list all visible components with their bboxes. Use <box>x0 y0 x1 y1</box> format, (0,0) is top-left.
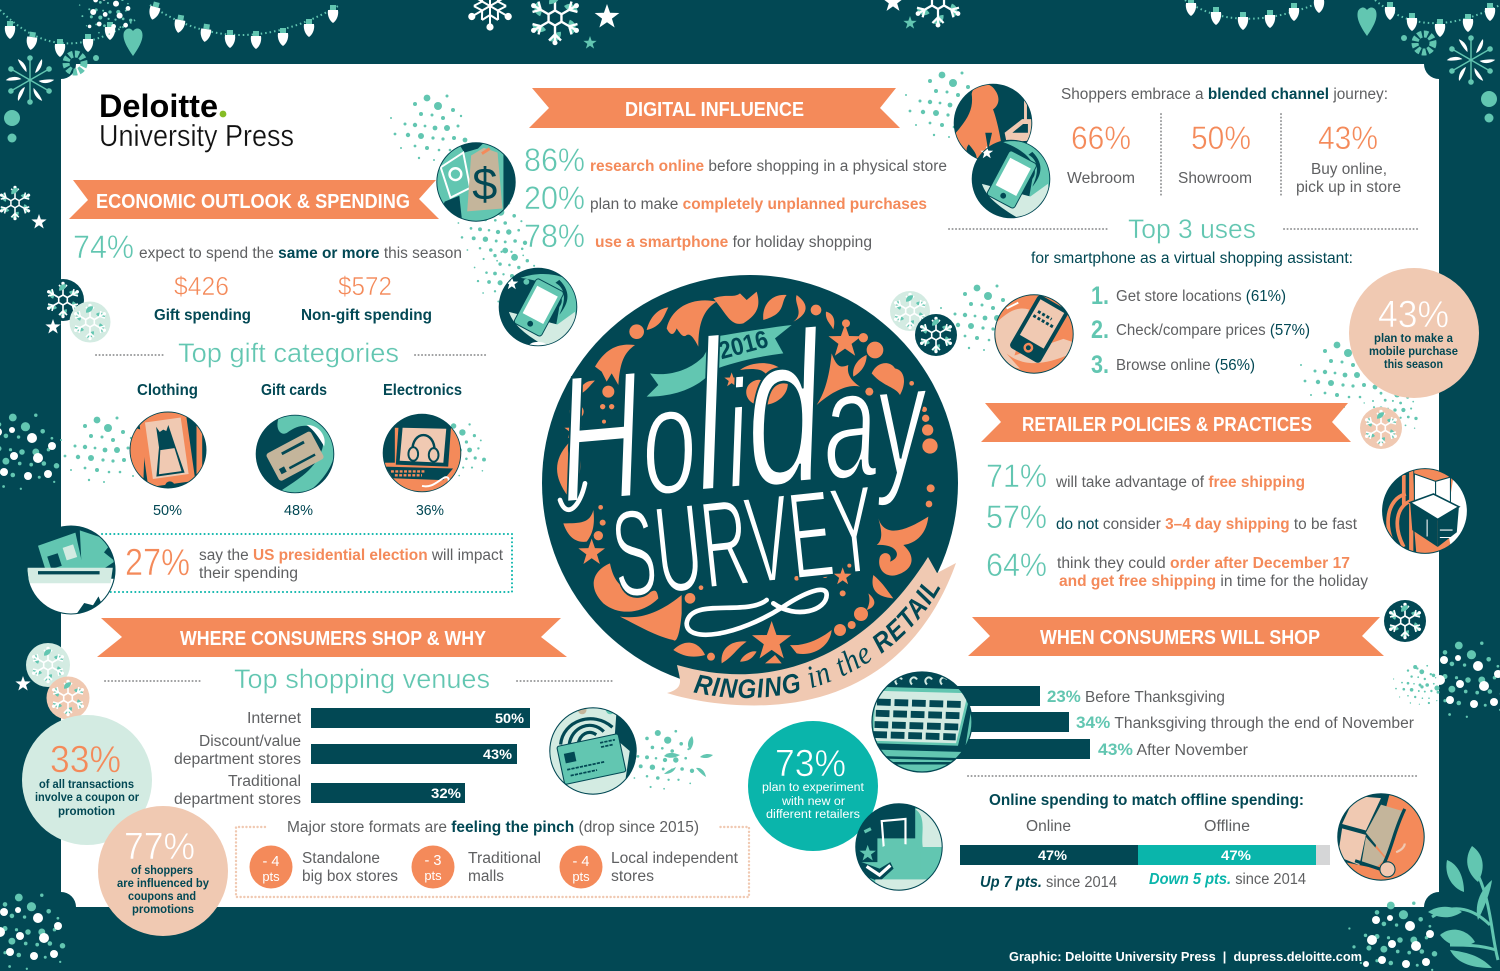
stat: local independent stores <box>560 846 739 888</box>
bar chart: timing: 23% Before Thanksgiving <box>1047 687 1225 706</box>
logo: Deloitte University Press: Deloitte <box>99 88 218 124</box>
list: top three uses: 3. <box>1091 351 1109 379</box>
stat: webroom: 66% <box>1071 120 1131 156</box>
banner: retailer policies <box>981 403 1351 442</box>
border decoration: top left lights <box>0 0 340 143</box>
stat: traditional malls: pts <box>424 868 442 883</box>
stacked bar: online vs offline: Up 7 pts. since 2014 <box>980 874 1117 891</box>
ribbon: ringing in the retail: RINGING in the RETAIL <box>694 584 940 698</box>
list: top three uses: Get store locations (61%) <box>1116 288 1286 305</box>
lettering: Survey: SURVEY <box>606 460 882 624</box>
logo: Deloitte University Press <box>99 88 294 153</box>
stat: gift spending: $426 <box>174 271 229 301</box>
callout: 77 percent coupons: of shoppers <box>131 865 193 877</box>
stat: buy online pick up in store: pick up in store <box>1296 179 1401 196</box>
stacked bar: online vs offline: 47% <box>1221 847 1252 863</box>
stat: standalone big box stores: big box stores <box>302 868 398 885</box>
callout: presidential election <box>27 526 512 620</box>
bar chart: timing: 34% Thanksgiving through the end of November <box>1076 713 1414 732</box>
stat: 71 percent: 71% <box>986 458 1047 494</box>
callout: presidential election: say the US presidential election will impact <box>199 547 504 564</box>
white content panel <box>61 64 1439 907</box>
stat: 86 percent <box>524 142 947 178</box>
stat: webroom: Webroom <box>1067 170 1135 187</box>
banner: economic outlook <box>69 180 439 219</box>
stat: standalone big box stores: pts <box>262 869 280 884</box>
list: top three uses <box>1091 282 1310 379</box>
stat: local independent stores: - 4 <box>573 854 589 870</box>
category: electronics: 36% <box>416 503 444 519</box>
heading: online vs offline: Online spending to match offline spending: <box>989 792 1304 809</box>
icon: person reading <box>856 804 944 892</box>
banner: retailer policies: RETAILER POLICIES & PRACTICES <box>1022 414 1312 436</box>
stat: 74 percent <box>73 229 462 265</box>
icon: gift card in hand <box>256 413 335 495</box>
list: top three uses: 1. <box>1091 282 1109 310</box>
stat: 74 percent: 74% <box>73 229 134 265</box>
stat: traditional malls: malls <box>468 868 504 885</box>
stacked bar: online vs offline <box>960 818 1330 891</box>
icon: calendar <box>872 672 972 772</box>
stat: 71 percent: will take advantage of free shipping <box>1055 474 1305 491</box>
callout: 73 percent new retailers <box>748 721 878 851</box>
stat: local independent stores: stores <box>611 868 654 885</box>
bar chart: top shopping venues: 50% <box>495 710 525 726</box>
icon: woman with laptop <box>954 84 1032 164</box>
stat: 64 percent <box>986 547 1368 590</box>
callout: 77 percent coupons: are influenced by <box>117 878 210 890</box>
callout: 33 percent coupons: of all transactions <box>39 779 134 791</box>
stat: traditional malls: - 3 <box>425 853 441 869</box>
category: gift cards <box>256 382 335 519</box>
bar chart: top shopping venues: department stores <box>174 751 301 768</box>
lettering flourish <box>560 483 827 635</box>
bar chart: top shopping venues: Traditional <box>228 773 301 790</box>
callout: 77 percent coupons: coupons and <box>128 891 196 903</box>
callout: 77 percent coupons <box>98 806 228 936</box>
stat: 64 percent: and get free shipping in time for the holiday <box>1059 573 1368 590</box>
badge circle <box>542 275 958 691</box>
botanical vine bottom right <box>1428 846 1498 968</box>
logo: Deloitte University Press: University Press <box>99 118 294 153</box>
stat: gift spending: Gift spending <box>154 307 251 324</box>
heading: top shopping venues: Top shopping venues <box>234 664 490 694</box>
panel: economic outlook and spending <box>27 180 512 620</box>
stat: local independent stores: Local independent <box>611 850 739 867</box>
callout: feeling the pinch: Major store formats are feeling the pinch (drop since 2015) <box>287 819 699 836</box>
callout: 43 percent mobile purchase: plan to make a <box>1374 333 1454 345</box>
callout: 43 percent mobile purchase: mobile purchase <box>1369 346 1458 358</box>
callout: 33 percent coupons: involve a coupon or <box>35 792 139 804</box>
border decoration: top right lights <box>1185 0 1500 122</box>
stat: 64 percent: think they could order after December 17 <box>1057 555 1350 572</box>
stat: 86 percent: 86% <box>524 142 585 178</box>
panel: when consumers will shop <box>748 617 1424 892</box>
stat: showroom: Showroom <box>1178 170 1252 187</box>
snowflake ornaments <box>15 278 1428 720</box>
credit line: Graphic: Deloitte University Press | dupress.deloitte.com <box>1009 949 1362 964</box>
subheading: virtual shopping assistant: for smartphone as a virtual shopping assistant: <box>1031 250 1353 267</box>
stat: showroom <box>1178 120 1252 187</box>
bar chart: top shopping venues <box>174 708 530 808</box>
stat: 57 percent: 57% <box>986 499 1047 535</box>
callout: 77 percent coupons: 77% <box>124 826 195 868</box>
icon: smartphone in hand <box>499 268 579 352</box>
stat: 78 percent <box>524 218 872 254</box>
stat: non-gift spending <box>301 271 432 324</box>
callout: 73 percent new retailers: with new or <box>781 796 845 808</box>
callout: 77 percent coupons: promotions <box>132 904 194 916</box>
stat: 74 percent: expect to spend the same or more this season <box>139 245 462 262</box>
stat: standalone big box stores: - 4 <box>263 854 279 870</box>
stacked bar: online vs offline: 47% <box>1038 847 1068 863</box>
stat: buy online pick up in store: Buy online, <box>1311 161 1387 178</box>
stat: traditional malls: Traditional <box>468 850 541 867</box>
callout: 43 percent mobile purchase: 43% <box>1378 294 1449 336</box>
callout: 73 percent new retailers: different retailers <box>766 809 860 821</box>
heading: top gift categories: Top gift categories <box>178 338 399 368</box>
stat: gift spending <box>154 271 251 324</box>
category: clothing <box>130 382 206 519</box>
icon: dress on tablet <box>130 409 206 491</box>
stat: traditional malls <box>412 846 541 888</box>
callout: 33 percent coupons <box>22 715 152 845</box>
panel: digital influence <box>437 88 947 352</box>
bar chart: timing: 43% After November <box>1098 740 1248 759</box>
list: top three uses: 2. <box>1091 316 1109 344</box>
callout: presidential election: 27% <box>125 542 190 584</box>
bar chart: top shopping venues: Internet <box>247 710 302 727</box>
icon: smartphone shopping <box>972 140 1052 220</box>
icon: delivery boxes <box>1383 469 1467 556</box>
stat: local independent stores: pts <box>572 869 590 884</box>
panel: blended channel <box>949 84 1479 398</box>
stacked bar: online vs offline: Offline <box>1204 818 1250 835</box>
border decoration: top centre snowflakes <box>465 0 971 51</box>
callout: 33 percent coupons: promotion <box>58 806 115 818</box>
category: clothing: 50% <box>153 503 182 519</box>
banner: digital influence: DIGITAL INFLUENCE <box>625 99 804 121</box>
icon: contactless card <box>550 706 638 794</box>
stat: 20 percent <box>524 180 927 216</box>
floral ornaments <box>547 279 938 663</box>
category: clothing: Clothing <box>137 382 198 399</box>
callout: 43 percent mobile purchase <box>1349 268 1479 398</box>
callout: 33 percent coupons: 33% <box>50 739 121 781</box>
list: top three uses: Browse online (56%) <box>1116 357 1255 374</box>
banner: when consumers will shop <box>968 617 1384 656</box>
central badge: Holiday Survey <box>542 275 958 706</box>
border decoration: left flake <box>0 182 47 228</box>
banner: economic outlook: ECONOMIC OUTLOOK & SPENDING <box>96 191 410 213</box>
stat: 64 percent: 64% <box>986 547 1047 583</box>
panel: where consumers shop and why <box>22 618 749 936</box>
stat: non-gift spending: Non-gift spending <box>301 307 432 324</box>
banner: digital influence <box>529 88 900 128</box>
category: gift cards: Gift cards <box>261 382 327 399</box>
icon: hand holding phone <box>995 294 1078 373</box>
heading: blended channel: Shoppers embrace a blended channel journey: <box>1061 86 1388 103</box>
stat: standalone big box stores: Standalone <box>302 850 380 867</box>
list: top three uses: Check/compare prices (57%) <box>1116 322 1310 339</box>
category: gift cards: 48% <box>284 503 313 519</box>
panel: retailer policies and practices <box>981 403 1467 590</box>
stacked bar: online vs offline: Online <box>1026 818 1071 835</box>
callout: 73 percent new retailers: plan to experiment <box>762 782 865 794</box>
ribbon: 2016 <box>647 325 792 397</box>
stat: 78 percent: use a smartphone for holiday shopping <box>595 234 872 251</box>
bar chart: top shopping venues: Discount/value <box>199 733 301 750</box>
stat: 78 percent: 78% <box>524 218 585 254</box>
heading: top 3 uses: Top 3 uses <box>1128 214 1256 244</box>
stat: buy online pick up in store: 43% <box>1318 120 1378 156</box>
category: electronics: Electronics <box>383 382 462 399</box>
bar chart: top shopping venues: department stores <box>174 791 301 808</box>
icon: ballot box <box>27 526 115 620</box>
icon: price tag and cash <box>437 143 517 223</box>
stat: standalone big box stores <box>250 846 398 888</box>
banner: when consumers will shop: WHEN CONSUMERS WILL SHOP <box>1040 627 1320 649</box>
stat: webroom <box>1067 120 1135 187</box>
ribbon: 2016: 2016 <box>716 326 771 365</box>
callout: 73 percent new retailers: 73% <box>775 743 846 785</box>
stat: 57 percent: do not consider 3–4 day shipping to be fast <box>1056 516 1358 533</box>
callout: 43 percent mobile purchase: this season <box>1384 359 1443 371</box>
stat: 20 percent: plan to make completely unplanned purchases <box>590 196 927 213</box>
stat: 57 percent <box>986 499 1358 535</box>
icon: hand truck <box>1338 794 1424 880</box>
lettering: Holiday: Holiday <box>547 279 938 548</box>
banner: where consumers shop: WHERE CONSUMERS SHOP & WHY <box>180 628 487 650</box>
icon: price tag and cash: $ <box>472 159 497 210</box>
bar chart: top shopping venues: 43% <box>483 746 513 762</box>
stat: showroom: 50% <box>1191 120 1251 156</box>
bar chart: top shopping venues: 32% <box>431 785 462 801</box>
stacked bar: online vs offline: Down 5 pts. since 2014 <box>1149 871 1306 888</box>
callout: feeling the pinch <box>236 819 749 897</box>
banner: where consumers shop <box>97 618 567 657</box>
stat: 86 percent: research online before shopping in a physical store <box>590 158 947 175</box>
category: electronics <box>383 382 462 519</box>
stat: 71 percent <box>986 458 1305 494</box>
stat: non-gift spending: $572 <box>338 271 392 301</box>
icon: laptop and headphones <box>383 414 461 492</box>
callout: presidential election: their spending <box>199 565 298 582</box>
stat: buy online pick up in store <box>1296 120 1401 196</box>
bar chart: timing <box>930 686 1414 759</box>
stat: 20 percent: 20% <box>524 180 585 216</box>
